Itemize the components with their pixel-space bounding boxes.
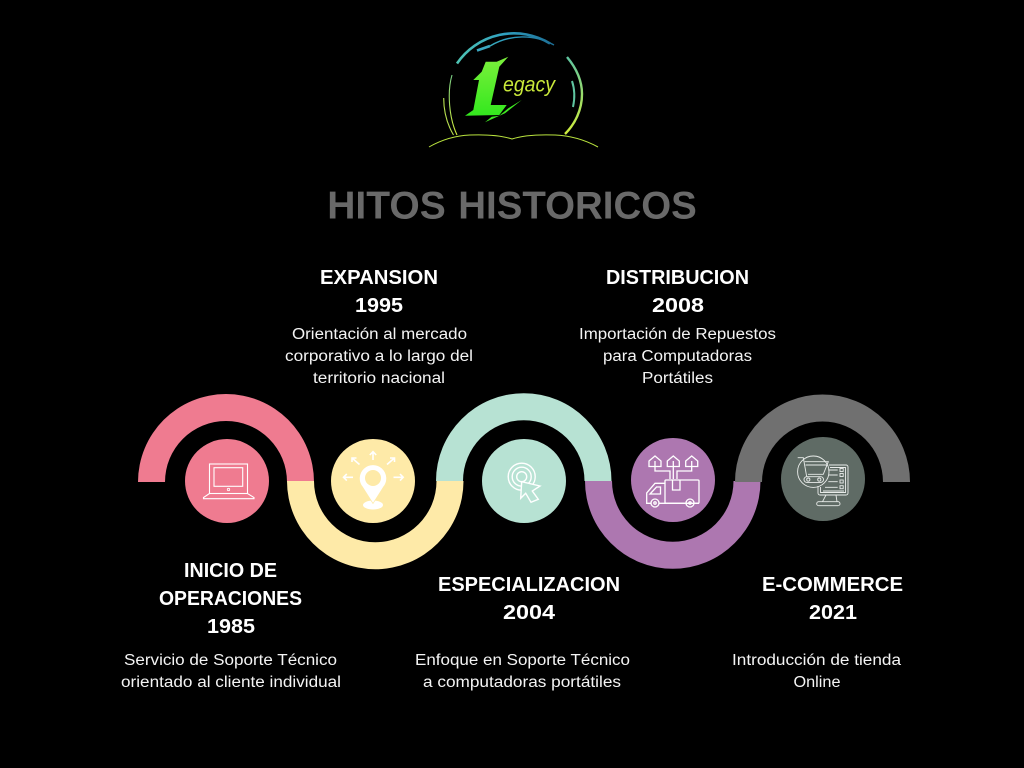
text block: Distribucion 2008: Importación de Repuestos — [579, 326, 776, 343]
logo: Legacy — [429, 33, 598, 147]
text block: Expansion 1995: EXPANSION — [320, 267, 438, 289]
icon: delivery truck — [631, 438, 715, 522]
text block: Expansion 1995: 1995 — [355, 295, 403, 317]
text block: E-commerce 2021: Online — [794, 674, 840, 691]
text block: Inicio de operaciones 1985 — [121, 560, 341, 691]
text block: Inicio de operaciones 1985: OPERACIONES — [159, 588, 302, 610]
text block: Expansion 1995: Orientación al mercado — [292, 326, 467, 343]
text block: Distribucion 2008: DISTRIBUCION — [606, 267, 749, 289]
text block: Expansion 1995 — [285, 267, 473, 387]
arc: teal — [436, 393, 612, 481]
icon: click cursor — [482, 439, 566, 523]
icon: location pin — [331, 439, 415, 523]
text block: Distribucion 2008: 2008 — [652, 295, 704, 317]
text block: Distribucion 2008 — [579, 267, 776, 387]
arc: grey — [735, 394, 910, 482]
text block: Especializacion 2004: 2004 — [503, 602, 556, 624]
text block: Especializacion 2004: ESPECIALIZACION — [438, 574, 620, 596]
arc: purple — [585, 481, 760, 569]
arc: pink — [138, 394, 314, 482]
text block: Expansion 1995: corporativo a lo largo del — [285, 348, 473, 365]
icon: online shop — [781, 437, 865, 521]
text block: Inicio de operaciones 1985: INICIO DE — [184, 560, 277, 582]
text block: Inicio de operaciones 1985: orientado al cliente individual — [121, 674, 341, 691]
text block: Especializacion 2004: Enfoque en Soporte Técnico — [415, 652, 630, 669]
text block: E-commerce 2021: 2021 — [809, 602, 857, 624]
text block: Expansion 1995: territorio nacional — [313, 370, 445, 387]
text block: Distribucion 2008: Portátiles — [642, 370, 713, 387]
text block: Especializacion 2004 — [415, 574, 630, 691]
text block: Especializacion 2004: a computadoras portátiles — [423, 674, 621, 691]
text block: Inicio de operaciones 1985: 1985 — [207, 616, 255, 638]
title: HITOS — [327, 184, 446, 228]
arc: yellow — [287, 481, 464, 569]
icon: laptop — [185, 439, 269, 523]
text block: E-commerce 2021: Introducción de tienda — [732, 652, 901, 669]
text block: E-commerce 2021 — [732, 574, 903, 691]
logo: Legacy: egacy — [503, 74, 556, 96]
title: HISTORICOS — [458, 184, 697, 228]
serpentine timeline — [138, 393, 910, 569]
text block: E-commerce 2021: E-COMMERCE — [762, 574, 903, 596]
text block: Distribucion 2008: para Computadoras — [603, 348, 752, 365]
title — [327, 184, 697, 228]
text block: Inicio de operaciones 1985: Servicio de Soporte Técnico — [124, 652, 337, 669]
